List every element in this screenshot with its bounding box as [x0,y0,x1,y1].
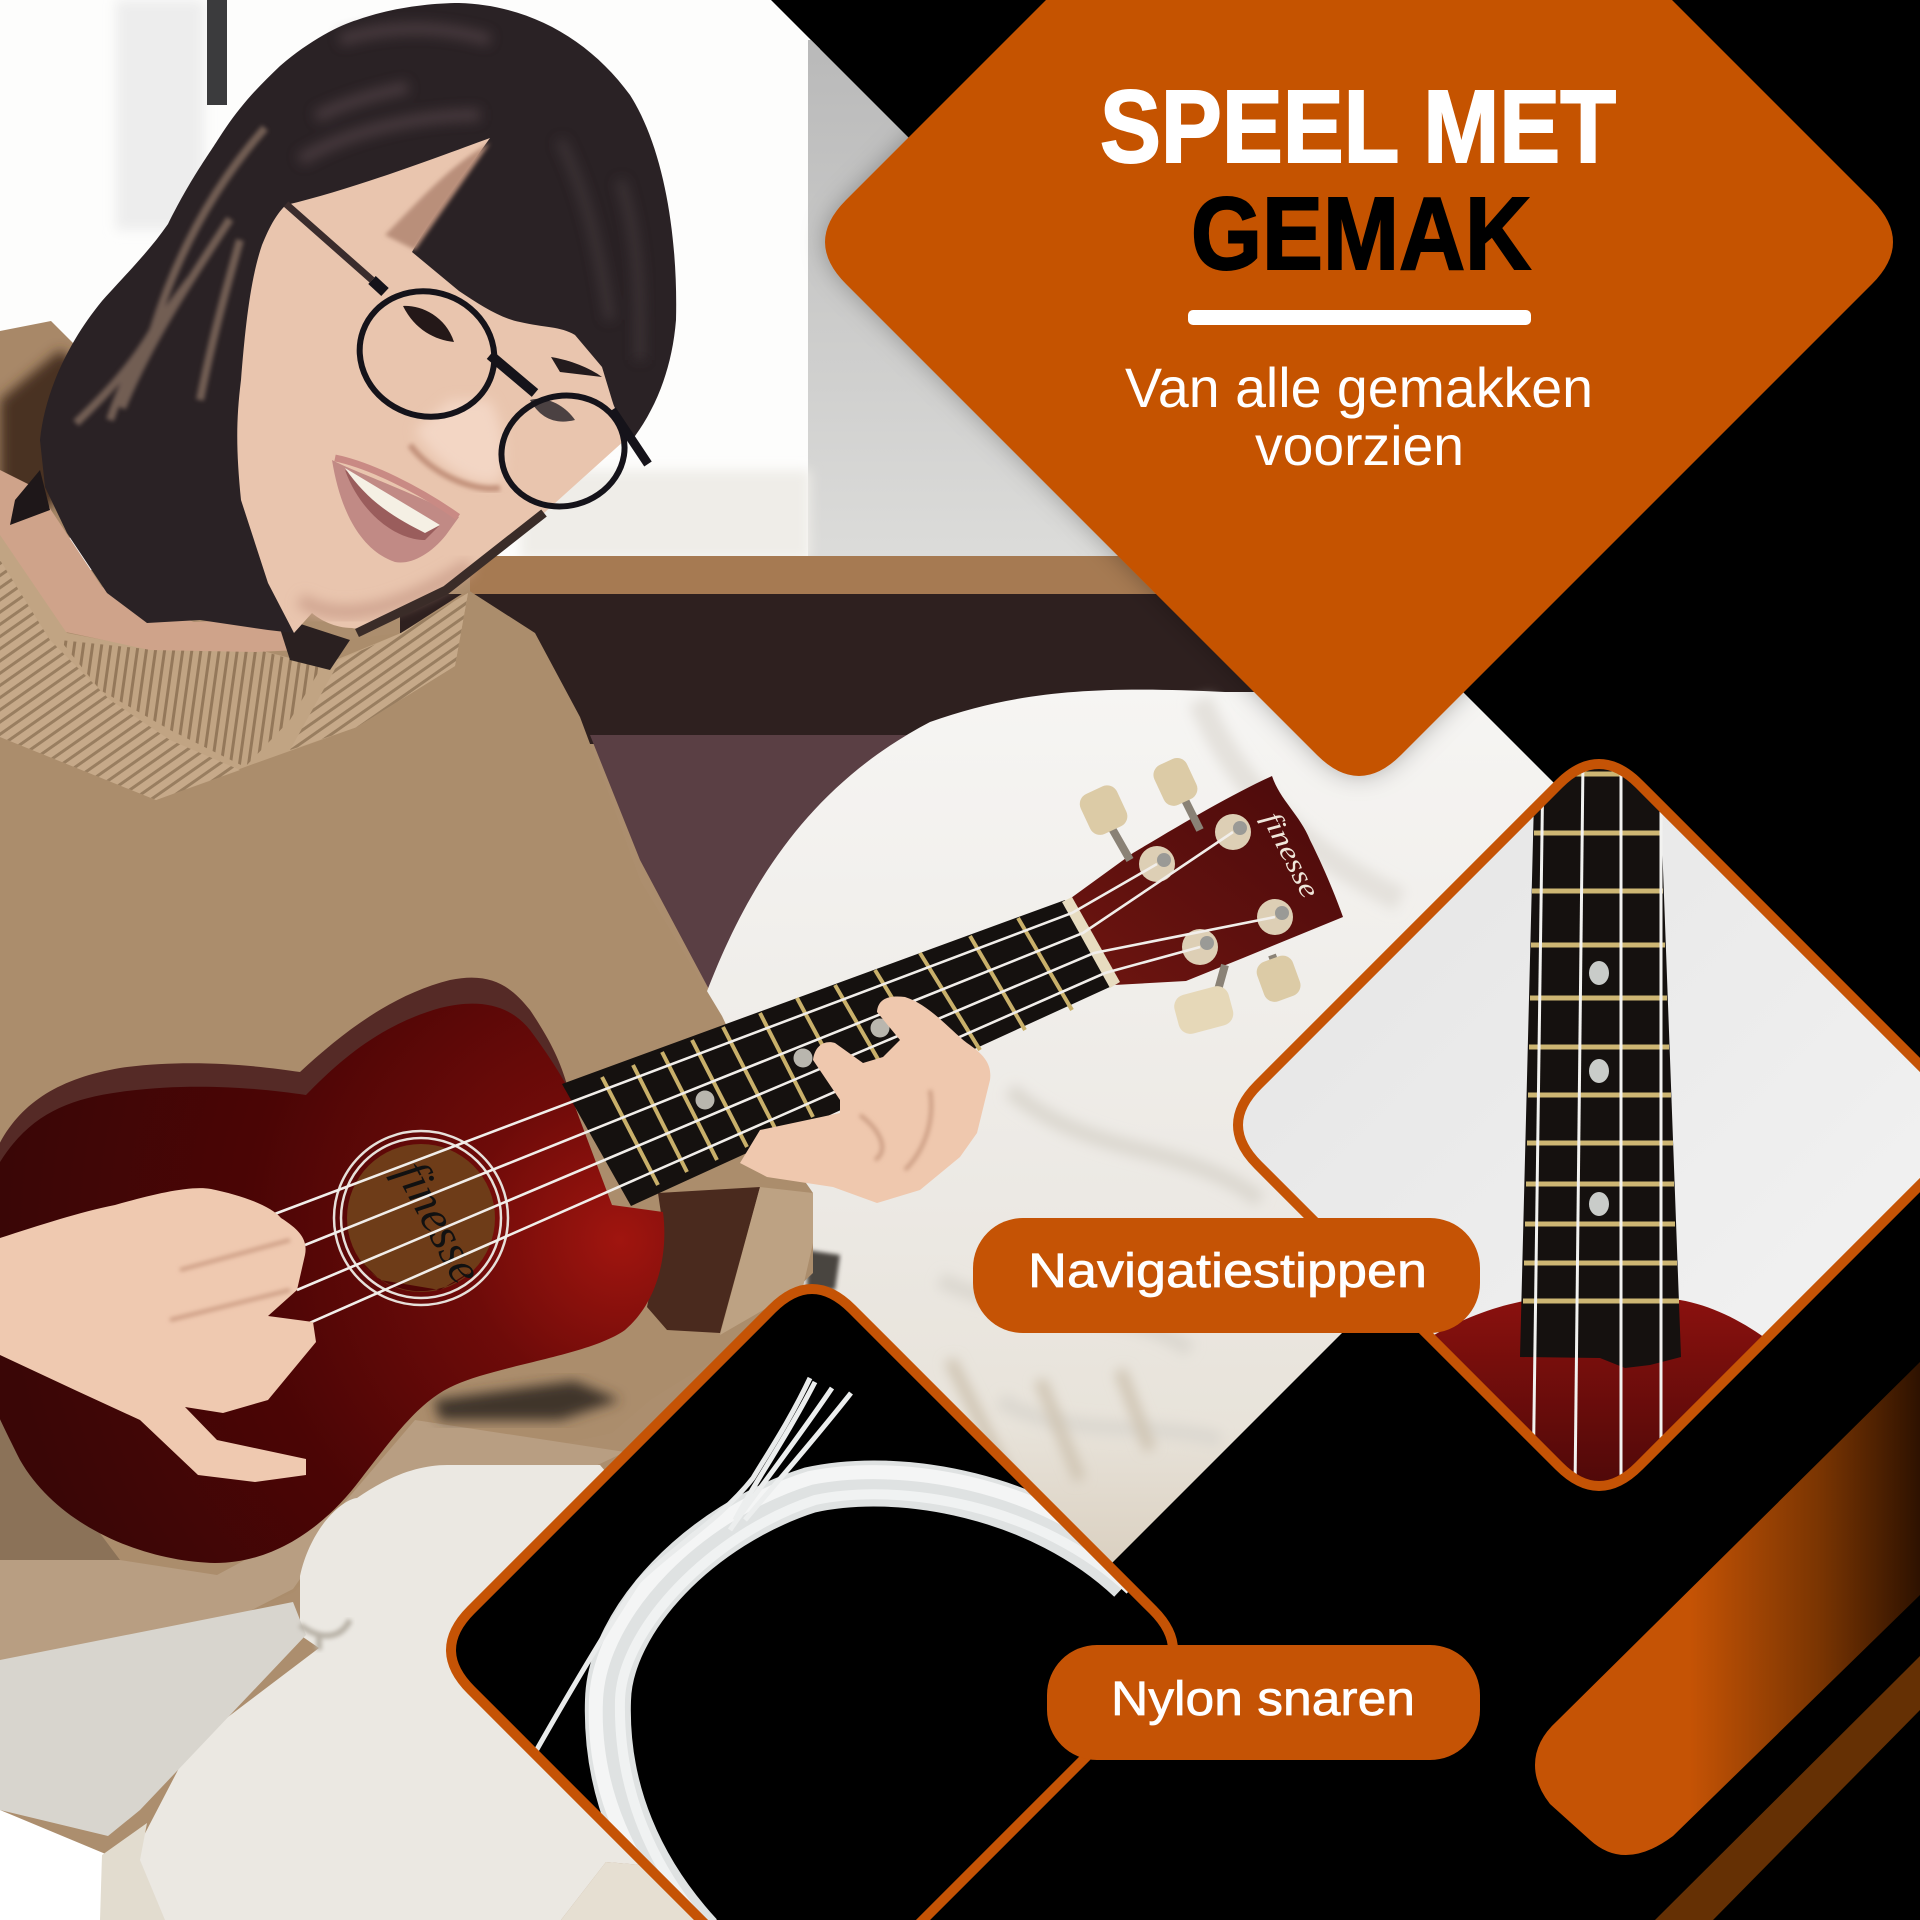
cuff [720,1187,813,1335]
ukulele body [0,1004,664,1563]
photo base [0,570,714,1920]
frets [602,918,1072,1185]
sound hole [334,1131,508,1305]
window background [0,0,1208,570]
neck shadow [281,624,350,670]
callout: Navigatiestippen: Navigatiestippen [1028,1245,1427,1298]
strumming hand [0,1188,316,1482]
bottom blanket [0,1810,760,1920]
headstock logo: finesse [1256,807,1325,903]
headstock [1071,776,1343,985]
face [237,138,625,633]
panel: headline diamond [825,0,1893,776]
fretting hand [740,996,990,1203]
ukulele body rim [0,978,566,1162]
close-up position dots [1589,961,1609,1216]
callout: Nylon snaren [1047,1645,1480,1760]
neck skin [0,470,300,652]
chin shadow [300,565,470,612]
strings [223,832,1275,1361]
sweater [0,321,813,1667]
close-up frets [1523,774,1679,1301]
forehead shadow [385,143,490,250]
subtitle line 2: voorzien [1255,414,1464,477]
panel: fretboard close-up [1238,760,1920,1500]
decorative gradient strip [1535,1362,1920,1855]
nylon strings image [536,1378,1130,1920]
title underline [1188,310,1531,325]
title line 1: SPEEL MET [1100,69,1616,184]
wooden shelf [470,556,1160,594]
close-up image: ukulele neck [1434,760,1765,1500]
dark cabinet [400,594,1300,744]
white blanket [707,688,1554,1562]
glasses [286,204,648,520]
hair lock over neck [357,513,544,633]
tuners [1076,754,1304,1037]
white trousers [0,1465,639,1920]
turtleneck collar [0,533,468,800]
sofa cushion [590,735,906,988]
ukulele [0,754,1343,1563]
sound hole: finesse [385,1152,493,1292]
fretboard [562,900,1112,1206]
cheek highlight [415,400,504,483]
position dots [696,1018,890,1110]
subtitle line 1: Van alle gemakken [1125,356,1593,419]
panel: nylon strings close-up [451,1289,1173,1920]
mouth [332,458,459,563]
close-up strings [1533,760,1661,1490]
nose shadow [410,445,500,489]
decorative thin strip [1655,1656,1920,1920]
sleeve shadow [647,1187,760,1333]
callout: Nylon snaren: Nylon snaren [1111,1673,1415,1726]
eyes [403,306,602,422]
title line 2: GEMAK [1191,176,1531,291]
nut [1062,897,1120,988]
hair [10,3,676,633]
sweater hem [0,1420,625,1667]
callout: Navigatiestippen [973,1218,1480,1333]
